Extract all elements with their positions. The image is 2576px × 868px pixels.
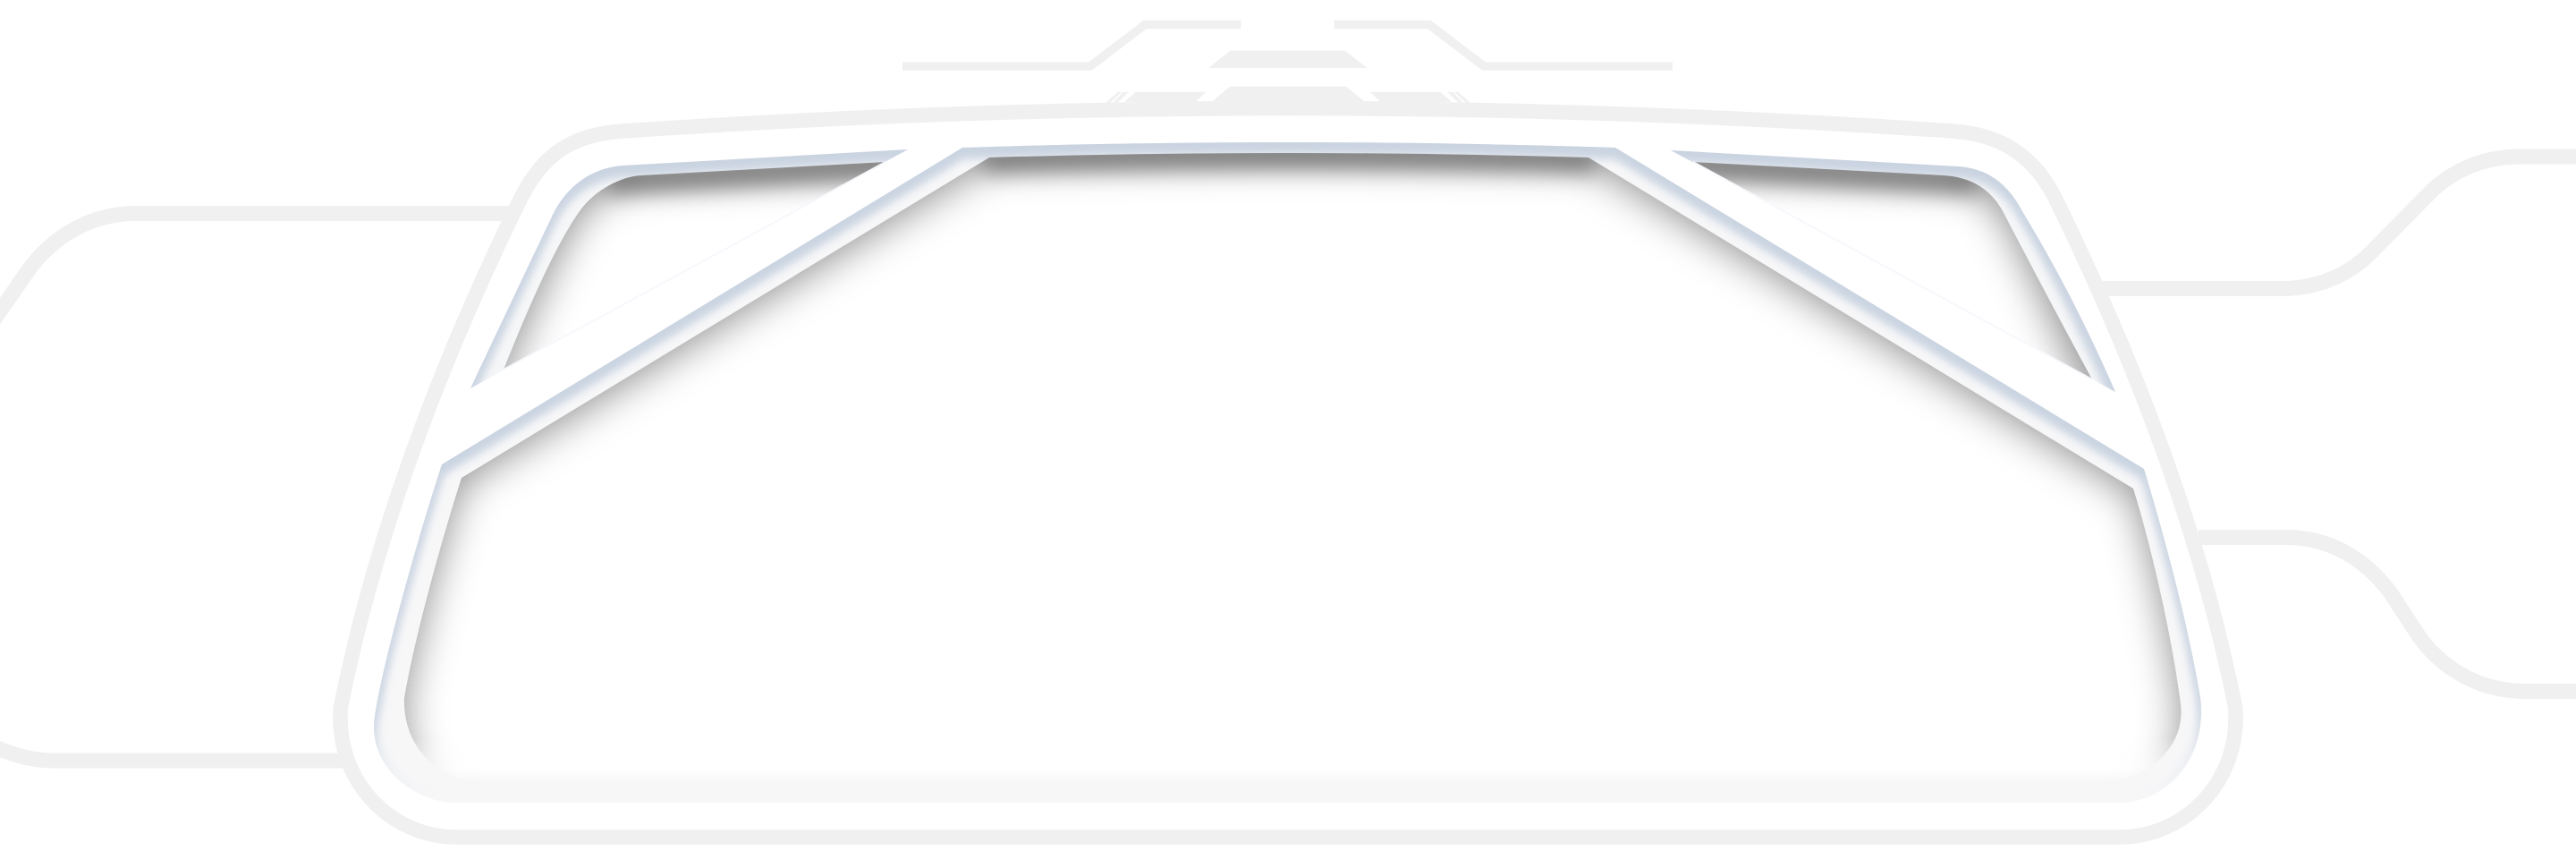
- top connector: right stepped trace: [1335, 25, 1673, 66]
- panel: main display recess: [374, 142, 2201, 796]
- top connector: trapezoids and slashes on frame: [1106, 87, 1470, 103]
- circuit trace: upper left: [0, 213, 512, 327]
- circuit trace: lower left: [0, 746, 345, 761]
- top connector: floating trapezoid: [1208, 51, 1367, 68]
- outer frame outline: [340, 108, 2236, 838]
- panel: upper right window: [1671, 150, 2115, 392]
- top connector: left stepped trace: [902, 25, 1241, 66]
- circuit trace: upper right: [2102, 157, 2576, 288]
- circuit trace: lower right: [2199, 537, 2576, 691]
- panel: upper left window: [470, 149, 908, 388]
